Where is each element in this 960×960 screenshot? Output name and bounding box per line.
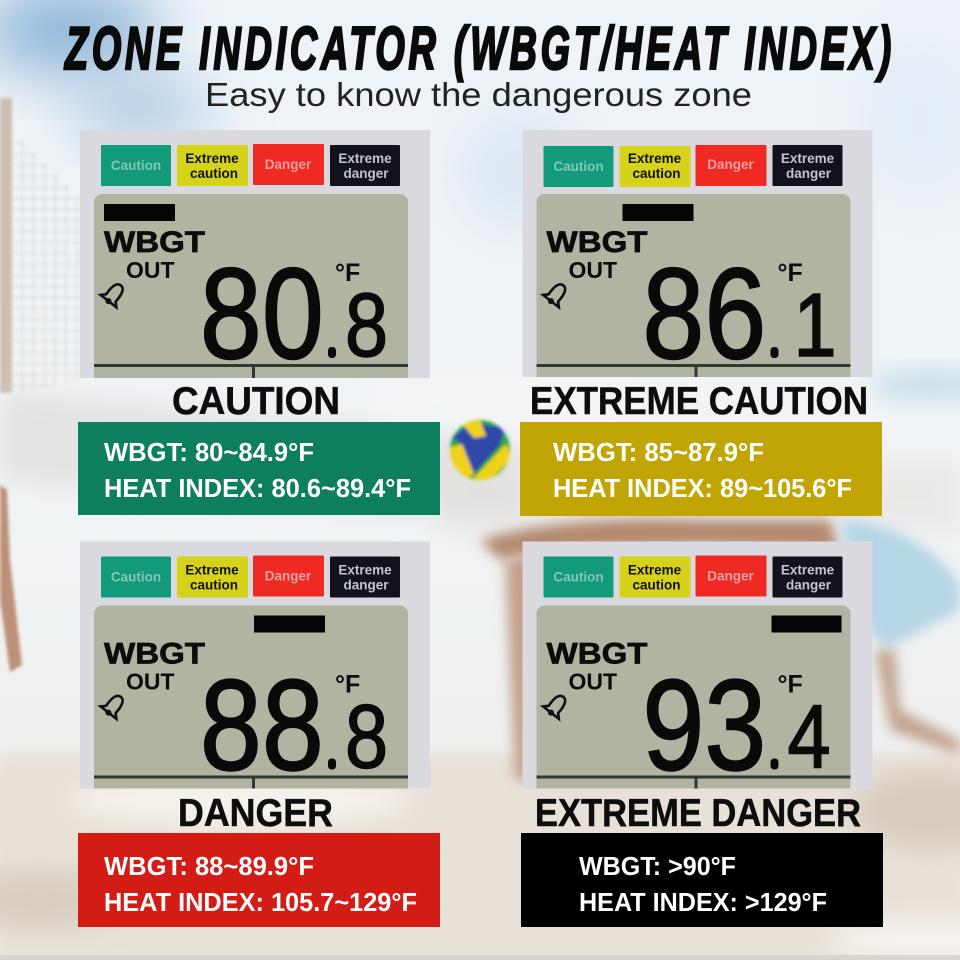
LCD screen: WBGT xyxy=(104,226,205,259)
LCD screen: °F xyxy=(335,259,360,287)
LCD screen: °F xyxy=(778,670,803,698)
panel: extreme danger ranges: HEAT INDEX: >129°F xyxy=(579,887,827,917)
LCD screen: WBGT xyxy=(546,638,648,670)
LCD screen: OUT xyxy=(126,668,175,694)
reading: 6 xyxy=(704,242,766,386)
LCD screen: °F xyxy=(778,259,803,287)
LCD screen xyxy=(536,194,850,386)
LCD screen xyxy=(94,194,408,386)
LCD screen xyxy=(94,606,408,797)
panel: danger ranges xyxy=(78,833,440,927)
icon: bell xyxy=(99,279,129,310)
panel: caution ranges: WBGT: 80~84.9°F xyxy=(104,437,314,467)
panel: danger display xyxy=(80,542,430,797)
LCD screen: OUT xyxy=(568,668,617,694)
reading: 8 xyxy=(642,242,704,386)
zone labels xyxy=(544,556,842,598)
zone labels: Extreme xyxy=(185,562,239,578)
LCD screen xyxy=(536,606,850,797)
zone labels: Extreme xyxy=(185,151,239,166)
reading: 1 xyxy=(794,275,837,375)
icon: bell xyxy=(99,691,129,721)
zone labels: Danger xyxy=(707,157,755,172)
reading: 4 xyxy=(788,686,831,787)
panel: extreme caution ranges: WBGT: 85~87.9°F xyxy=(553,437,764,467)
reading xyxy=(200,242,388,386)
zone labels: danger xyxy=(343,578,389,592)
LCD screen: WBGT xyxy=(546,226,648,259)
zone labels xyxy=(101,144,400,186)
zone labels: danger xyxy=(786,578,832,592)
heading: extreme danger: EXTREME DANGER xyxy=(535,792,861,835)
subtitle: Easy to know the dangerous zone xyxy=(205,76,752,113)
zone labels: danger xyxy=(786,166,832,181)
panel: caution ranges: HEAT INDEX: 80.6~89.4°F xyxy=(104,473,411,503)
zone labels: Extreme xyxy=(338,151,392,166)
zone labels: Extreme xyxy=(338,562,392,578)
reading xyxy=(642,654,831,797)
reading: 8 xyxy=(262,654,324,797)
reading: 9 xyxy=(642,654,704,797)
icon: volleyball xyxy=(450,420,512,484)
zone labels: caution xyxy=(632,166,681,181)
zone labels: Danger xyxy=(707,568,755,584)
panel: extreme caution display xyxy=(522,130,872,386)
reading: 8 xyxy=(345,686,388,787)
panel: caution display xyxy=(80,130,430,386)
heading: caution: CAUTION xyxy=(172,380,340,423)
reading: 0 xyxy=(262,242,324,386)
panel: extreme danger display xyxy=(522,542,872,797)
zone labels: Caution xyxy=(553,570,604,584)
zone labels xyxy=(544,145,842,187)
reading: 8 xyxy=(200,654,262,797)
reading xyxy=(642,242,837,386)
panel: danger ranges: HEAT INDEX: 105.7~129°F xyxy=(104,887,417,917)
zone labels: caution xyxy=(190,578,238,592)
zone labels: Extreme xyxy=(628,562,682,578)
heading: danger: DANGER xyxy=(178,792,333,835)
zone labels: Danger xyxy=(265,157,312,172)
zone labels: Extreme xyxy=(781,151,835,166)
zone labels: Danger xyxy=(265,568,312,584)
zone labels: Caution xyxy=(111,570,161,584)
zone labels: Caution xyxy=(111,158,161,173)
zone labels: Extreme xyxy=(628,151,682,166)
panel: danger ranges: WBGT: 88~89.9°F xyxy=(104,851,314,881)
LCD screen: WBGT xyxy=(104,638,205,670)
zone labels: Caution xyxy=(553,159,604,174)
zone labels xyxy=(101,556,400,598)
zone labels: caution xyxy=(632,578,681,592)
reading: 3 xyxy=(704,654,766,797)
zone labels: Extreme xyxy=(781,562,835,578)
icon: bell xyxy=(541,279,571,310)
panel: extreme caution ranges xyxy=(520,422,882,516)
panel: extreme danger ranges: WBGT: >90°F xyxy=(579,851,736,881)
heading: extreme caution: EXTREME CAUTION xyxy=(530,380,868,423)
LCD screen: °F xyxy=(335,670,360,698)
panel: caution ranges xyxy=(78,422,440,515)
zone labels: caution xyxy=(190,166,238,181)
LCD screen: OUT xyxy=(568,257,617,283)
icon: bell xyxy=(541,691,571,721)
panel: extreme danger ranges xyxy=(521,833,883,927)
LCD screen: OUT xyxy=(126,257,175,283)
reading: 8 xyxy=(345,275,388,375)
reading xyxy=(200,654,388,797)
reading: 8 xyxy=(200,242,262,386)
zone labels: danger xyxy=(343,166,389,181)
panel: extreme caution ranges: HEAT INDEX: 89~105.6°F xyxy=(553,473,852,503)
